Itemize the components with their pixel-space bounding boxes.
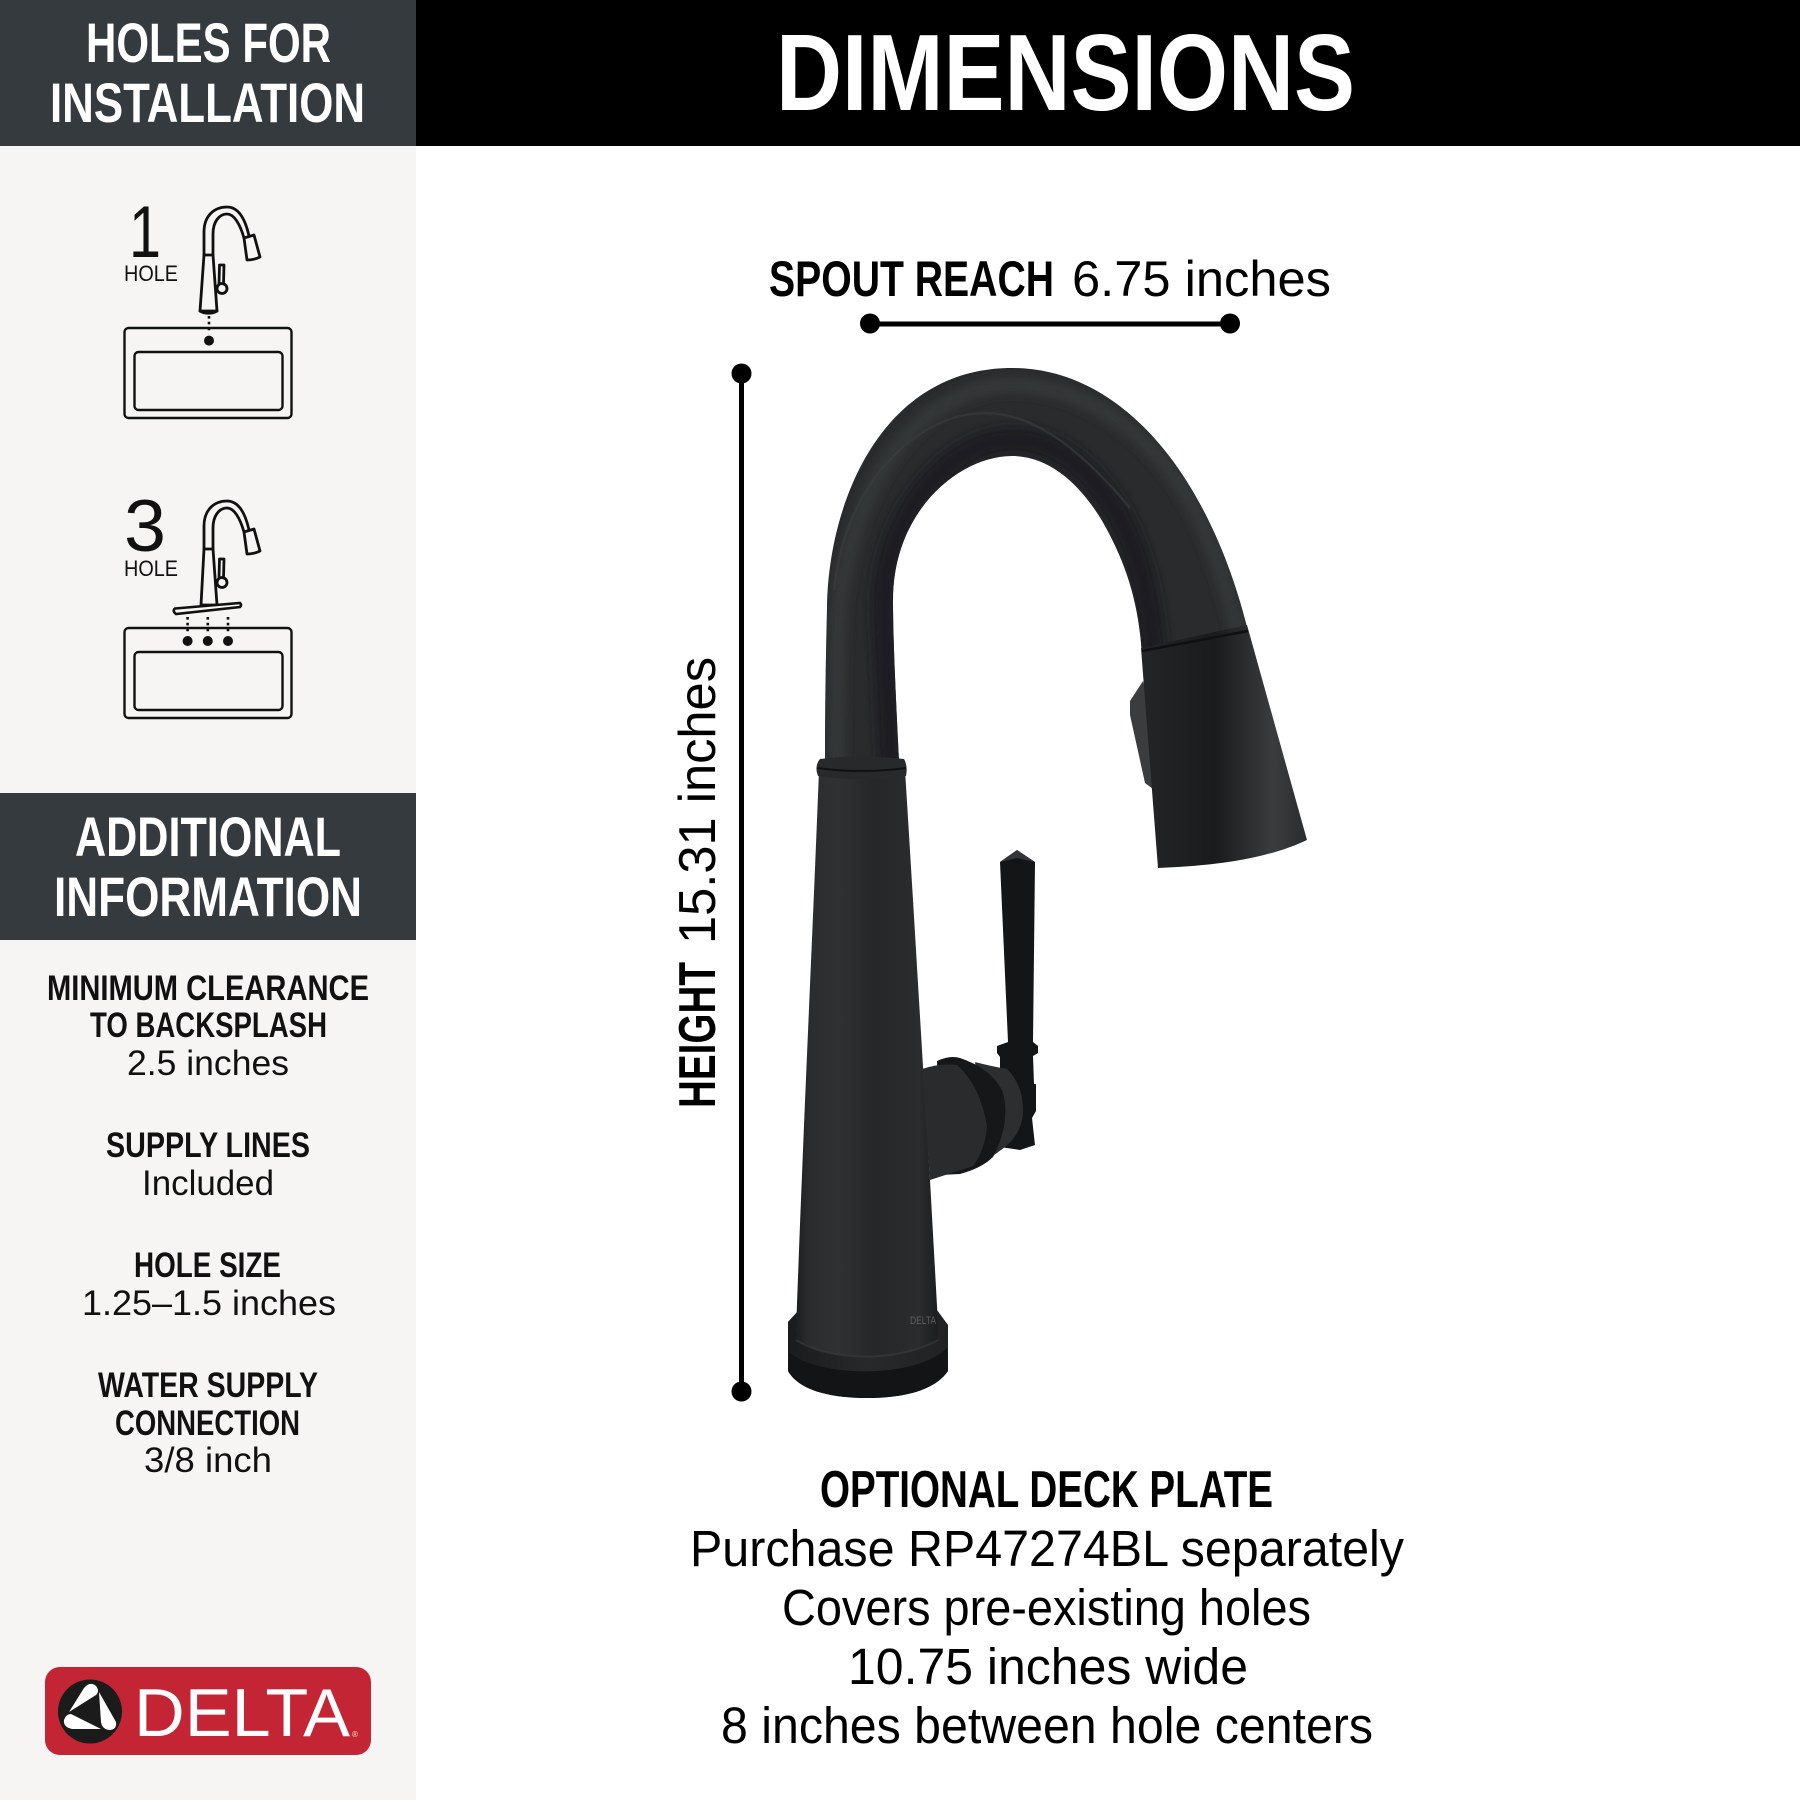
icon: 1 hole installation: HOLE	[124, 261, 178, 286]
text block: optional deck plate: Purchase RP47274BL separately	[690, 1520, 1404, 1577]
faucet base	[788, 1310, 948, 1398]
info: hole size: HOLE SIZE	[134, 1246, 281, 1285]
header band: holes for installation: HOLES FOR	[86, 11, 331, 74]
dimension: spout reach: SPOUT REACH	[769, 251, 1054, 307]
faucet handle	[997, 850, 1038, 1150]
info: water supply connection	[98, 1366, 318, 1480]
info: supply lines: SUPPLY LINES	[106, 1126, 310, 1165]
product image: matte black faucet	[788, 360, 1307, 1398]
icon: 1 hole installation: 1	[129, 192, 161, 273]
faucet spout arch	[825, 368, 1246, 758]
text block: optional deck plate: Covers pre-existing holes	[782, 1579, 1311, 1636]
text block: optional deck plate: 8 inches between hole centers	[721, 1697, 1373, 1754]
info: water supply connection: WATER SUPPLY	[98, 1366, 318, 1405]
dimension: height: HEIGHT	[669, 962, 727, 1108]
info: minimum clearance: MINIMUM CLEARANCE	[47, 969, 369, 1008]
text block: optional deck plate	[690, 1461, 1404, 1754]
logo: delta: DELTA	[134, 1675, 351, 1751]
icon: 1 hole installation	[124, 192, 292, 418]
info: minimum clearance: TO BACKSPLASH	[90, 1006, 327, 1045]
faucet collar	[816, 756, 907, 779]
dimension: spout reach: 6.75 inches	[1072, 251, 1331, 307]
dimension: spout reach	[769, 251, 1331, 334]
icon: 3 hole installation: 3	[124, 486, 166, 567]
info: supply lines: Included	[142, 1164, 274, 1203]
text block: optional deck plate: OPTIONAL DECK PLATE	[820, 1461, 1273, 1519]
info: hole size	[82, 1246, 336, 1323]
info: supply lines	[106, 1126, 310, 1203]
header band: additional information	[0, 793, 416, 940]
dimension: height: 15.31 inches	[669, 657, 727, 944]
logo: delta: ®	[352, 1730, 358, 1739]
info: minimum clearance: 2.5 inches	[127, 1044, 289, 1083]
title band: dimensions: DIMENSIONS	[776, 12, 1355, 134]
logo: delta	[45, 1667, 371, 1755]
title band: dimensions	[416, 0, 1800, 146]
info: hole size: 1.25–1.5 inches	[82, 1284, 336, 1323]
info: minimum clearance	[47, 969, 369, 1083]
faucet valve	[922, 1057, 1023, 1180]
header band: additional information: ADDITIONAL	[75, 805, 341, 868]
text block: optional deck plate: 10.75 inches wide	[848, 1638, 1248, 1695]
info: water supply connection: CONNECTION	[115, 1404, 300, 1443]
panel: sidebar background	[0, 0, 416, 1800]
icon: 3 hole installation: HOLE	[124, 556, 178, 581]
header band: holes for installation: INSTALLATION	[50, 71, 365, 134]
faucet pull-down spray head	[1130, 625, 1307, 868]
faucet body	[795, 770, 940, 1360]
header band: additional information: INFORMATION	[54, 865, 362, 928]
icon: 3 hole installation	[124, 486, 292, 718]
product image: matte black faucet: DELTA	[910, 1315, 937, 1327]
dimension: height	[669, 364, 752, 1402]
info: water supply connection: 3/8 inch	[144, 1441, 272, 1480]
header band: holes for installation	[0, 0, 416, 146]
